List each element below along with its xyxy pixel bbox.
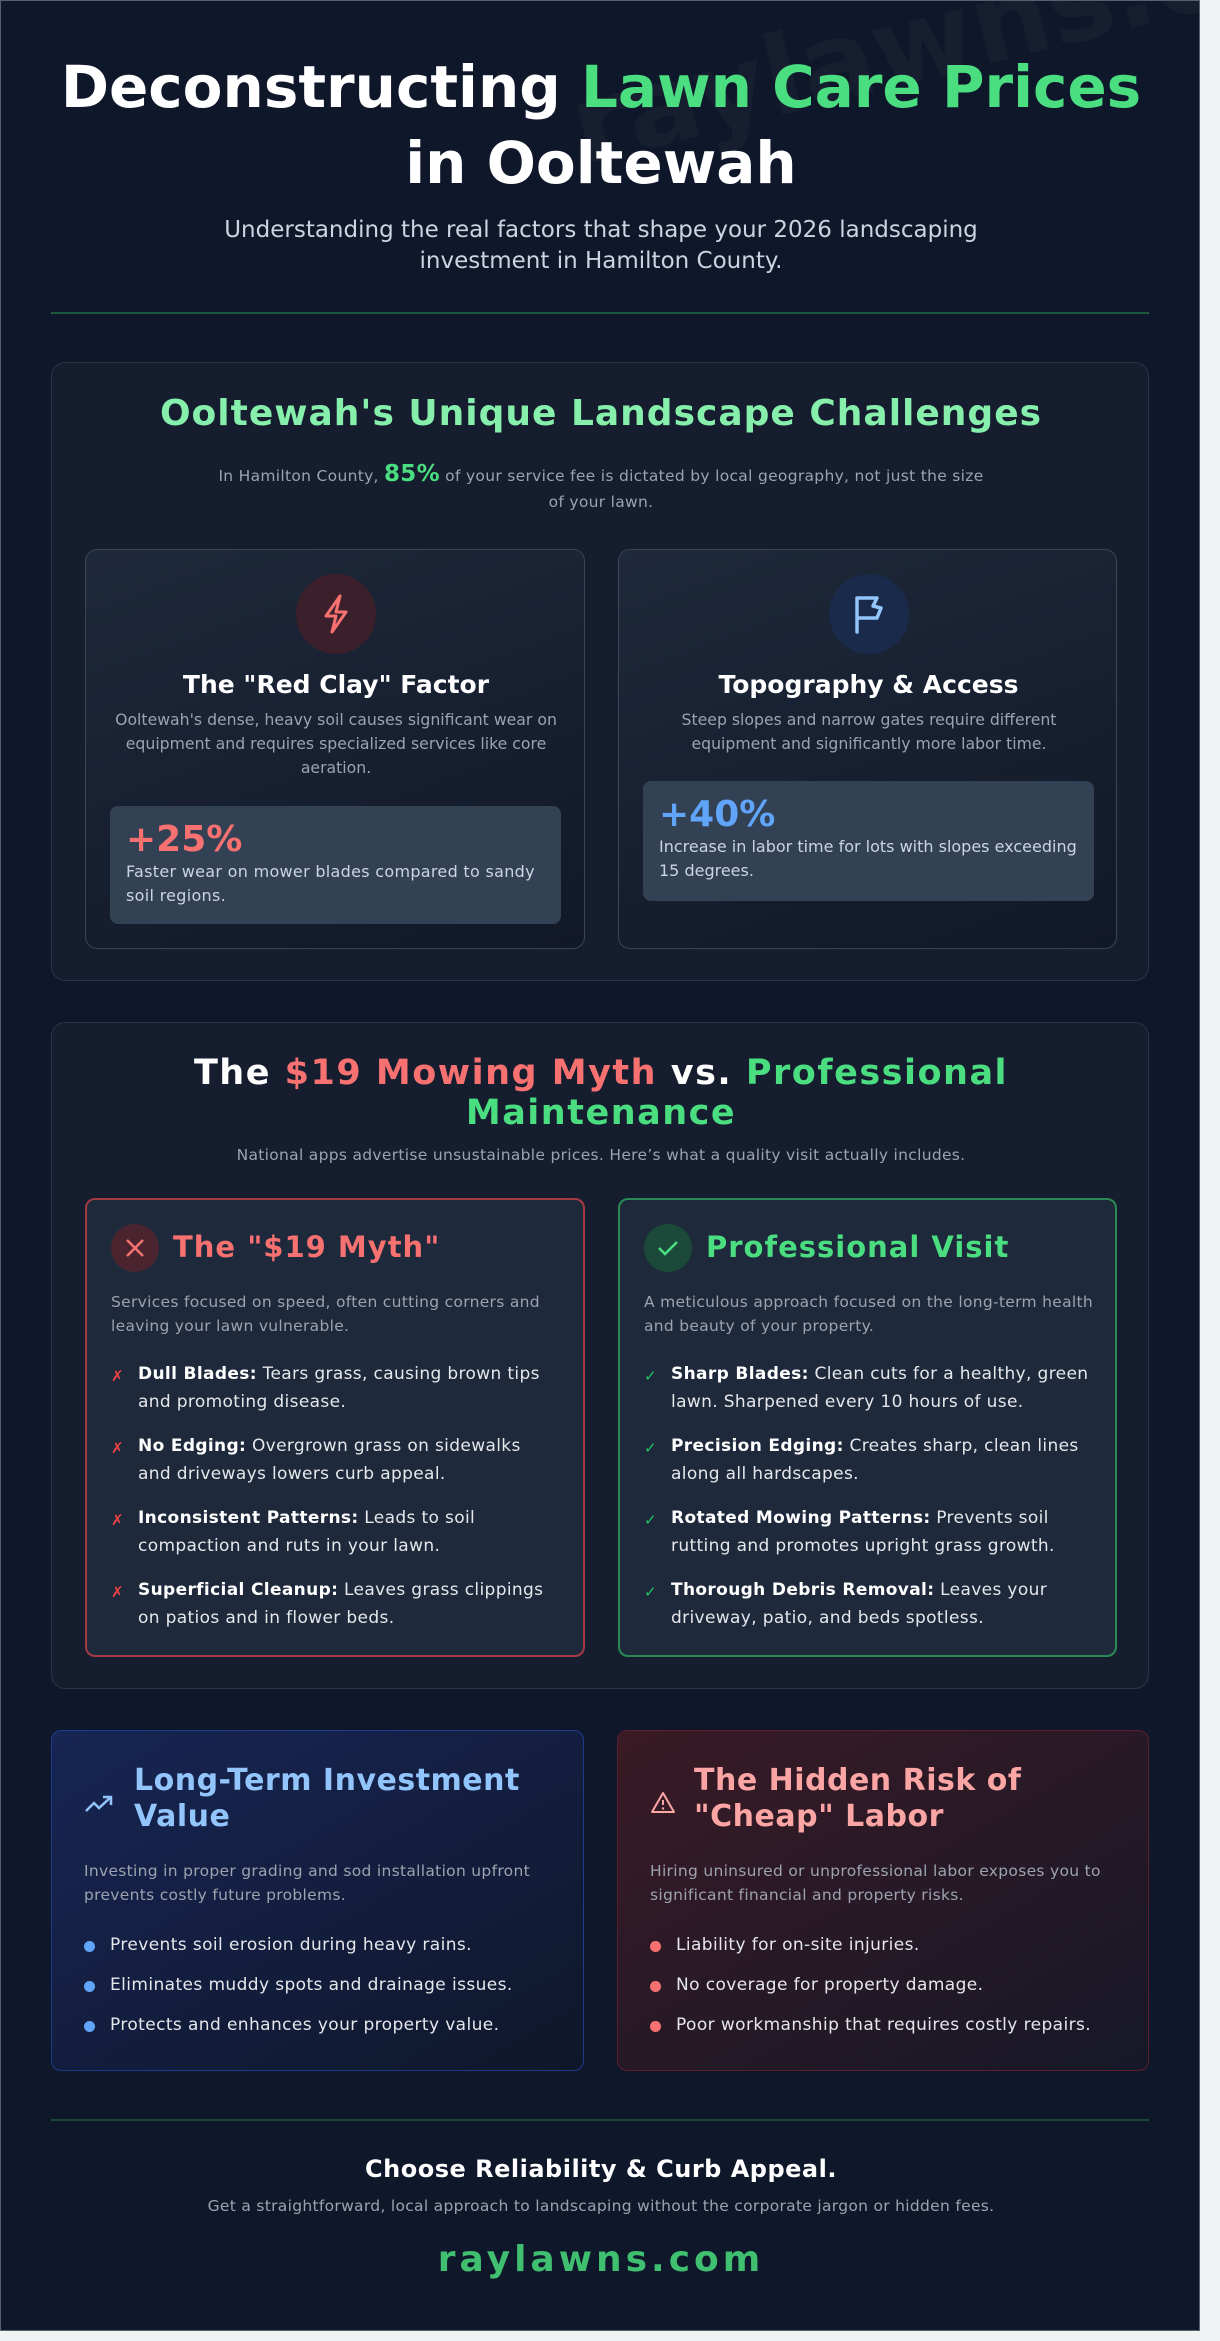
panel: hidden risk bbox=[617, 1730, 1149, 2071]
title bbox=[61, 53, 1141, 197]
list: professional benefits: ✓ bbox=[644, 1511, 657, 1529]
title: Deconstructing Lawn Care Prices bbox=[61, 53, 1141, 121]
list: professional benefits: ✓ bbox=[644, 1583, 657, 1601]
card desc: Ooltewah's dense, heavy soil causes significant wear on equipment and requires specialized services like core aeration. bbox=[115, 710, 557, 777]
title: in Ooltewah bbox=[405, 129, 797, 197]
list: myth problems: Dull Blades: Tears grass, causing brown tips and promoting disease. bbox=[138, 1364, 540, 1412]
list: professional benefits: Sharp Blades: Clean cuts for a healthy, green lawn. Sharpened every 10 hours of use. bbox=[671, 1364, 1088, 1412]
footer brand: raylawns.com bbox=[438, 2239, 764, 2280]
subtitle: Understanding the real factors that shape your 2026 landscaping investment in Hamilton County. bbox=[224, 217, 978, 274]
list: professional benefits bbox=[644, 1364, 1088, 1628]
list: benefits: Prevents soil erosion during heavy rains. bbox=[110, 1935, 472, 1955]
heading: challenges: Ooltewah's Unique Landscape Challenges bbox=[160, 393, 1042, 434]
card desc: A meticulous approach focused on the long-term health and beauty of your property. bbox=[644, 1293, 1093, 1335]
list: myth problems: Inconsistent Patterns: Leads to soil compaction and ruts in your lawn. bbox=[138, 1508, 475, 1556]
list: professional benefits: Rotated Mowing Patterns: Prevents soil rutting and promotes upright grass growth. bbox=[671, 1508, 1055, 1556]
list: risks: No coverage for property damage. bbox=[676, 1975, 983, 1995]
footer text: Get a straightforward, local approach to landscaping without the corporate jargon or hidden fees. bbox=[208, 2197, 994, 2215]
icon: lightning bbox=[296, 574, 376, 654]
card desc: Steep slopes and narrow gates require different equipment and significantly more labor time. bbox=[682, 710, 1056, 753]
icon: check bbox=[644, 1224, 692, 1272]
icon: trend up bbox=[85, 1796, 112, 1812]
list: benefits: Protects and enhances your property value. bbox=[110, 2015, 499, 2035]
panel: long-term investment bbox=[51, 1730, 584, 2071]
list: myth problems: ✗ bbox=[111, 1367, 124, 1385]
stat box: +25% bbox=[110, 806, 561, 924]
panel: landscape challenges bbox=[51, 362, 1149, 981]
card: professional visit bbox=[618, 1198, 1117, 1657]
stat box: +40%: Increase in labor time for lots with slopes exceeding 15 degrees. bbox=[659, 837, 1077, 880]
list: risks: Poor workmanship that requires costly repairs. bbox=[676, 2015, 1091, 2035]
card title: The "Red Clay" Factor bbox=[183, 670, 489, 699]
stat box: +40% bbox=[643, 781, 1094, 901]
footer heading: Choose Reliability & Curb Appeal. bbox=[365, 2155, 837, 2183]
list: myth problems: ✗ bbox=[111, 1583, 124, 1601]
card title: The "$19 Myth" bbox=[173, 1230, 440, 1264]
heading: The Hidden Risk of "Cheap" Labor bbox=[694, 1763, 1021, 1834]
list: risks: Liability for on-site injuries. bbox=[676, 1935, 920, 1955]
list: professional benefits: ✓ bbox=[644, 1439, 657, 1457]
list: myth problems: No Edging: Overgrown grass on sidewalks and driveways lowers curb appeal. bbox=[138, 1436, 521, 1484]
list: myth problems: ✗ bbox=[111, 1511, 124, 1529]
stat box: +25%: +25% bbox=[126, 819, 242, 860]
icon: warning bbox=[651, 1792, 675, 1813]
list: myth problems: ✗ bbox=[111, 1439, 124, 1457]
list: risks bbox=[650, 1935, 1091, 2035]
intro text: In Hamilton County, 85% of your service fee is dictated by local geography, not just the size of your lawn. bbox=[218, 461, 984, 511]
list: professional benefits: ✓ bbox=[644, 1367, 657, 1385]
panel: myth vs professional bbox=[51, 1022, 1149, 1689]
heading: myth vs pro: The $19 Mowing Myth vs. Professional Maintenance bbox=[194, 1053, 1008, 1133]
card: $19 myth bbox=[85, 1198, 585, 1657]
list: myth problems bbox=[111, 1364, 543, 1628]
icon: flag bbox=[829, 574, 909, 654]
subheading: National apps advertise unsustainable prices. Here’s what a quality visit actually includes. bbox=[237, 1146, 965, 1164]
list: professional benefits: Thorough Debris Removal: Leaves your driveway, patio, and beds spotless. bbox=[671, 1580, 1047, 1628]
card title: Topography & Access bbox=[718, 670, 1018, 699]
card desc: Services focused on speed, often cutting corners and leaving your lawn vulnerable. bbox=[111, 1293, 540, 1335]
list: professional benefits: Precision Edging: Creates sharp, clean lines along all hardscapes. bbox=[671, 1436, 1079, 1484]
heading: Long-Term Investment Value bbox=[134, 1763, 520, 1834]
desc: Hiring uninsured or unprofessional labor exposes you to significant financial and property risks. bbox=[650, 1862, 1101, 1904]
stat box: +40%: +40% bbox=[659, 794, 775, 835]
stat box: +25%: Faster wear on mower blades compared to sandy soil regions. bbox=[126, 862, 535, 905]
list: benefits: Eliminates muddy spots and drainage issues. bbox=[110, 1975, 513, 1995]
icon: x bbox=[111, 1224, 159, 1272]
list: benefits bbox=[84, 1935, 513, 2035]
card: red clay bbox=[85, 549, 585, 949]
card title: Professional Visit bbox=[706, 1230, 1009, 1264]
card: topography bbox=[618, 549, 1117, 949]
desc: Investing in proper grading and sod installation upfront prevents costly future problems. bbox=[84, 1862, 530, 1904]
list: myth problems: Superficial Cleanup: Leaves grass clippings on patios and in flower beds. bbox=[138, 1580, 543, 1628]
